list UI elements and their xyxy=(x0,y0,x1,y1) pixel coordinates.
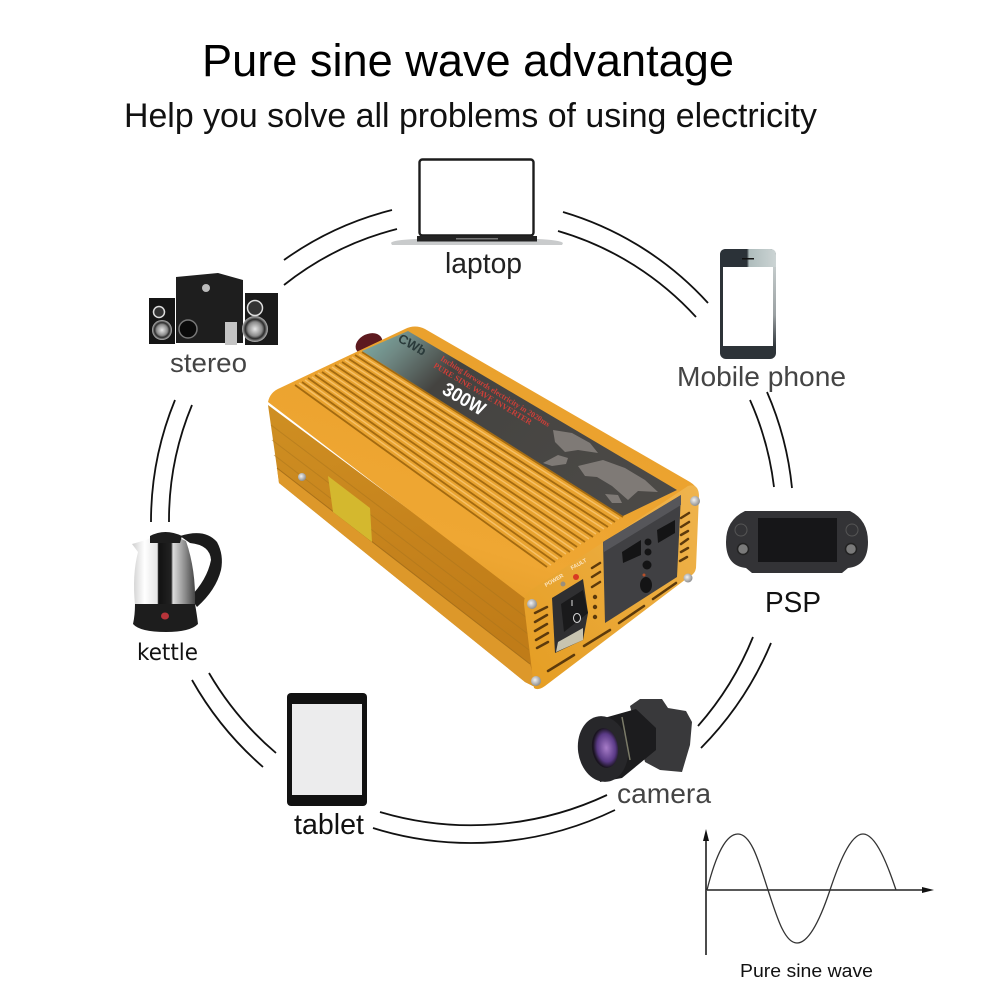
connector arcs: laptop to stereo xyxy=(284,210,397,285)
vent dots xyxy=(593,595,597,599)
label: camera: camera xyxy=(617,778,711,809)
label: laptop: laptop xyxy=(445,248,522,280)
inverter product: PURE SINE WAVE INVERTER xyxy=(432,361,534,427)
connector arcs: kettle to stereo xyxy=(151,400,192,522)
label: mobile phone: Mobile phone xyxy=(677,361,846,392)
title: Pure sine wave advantage xyxy=(202,35,734,86)
connector arcs: mobile phone to PSP xyxy=(750,392,792,488)
connector arcs: camera to tablet xyxy=(373,795,615,843)
chart: pure sine wave xyxy=(703,829,934,955)
inverter product: Inching forwards electricity in 2020ms xyxy=(439,354,552,429)
icon: camera xyxy=(574,699,692,785)
top face xyxy=(268,326,697,600)
indicator labels: POWER xyxy=(544,573,565,589)
connector arcs: laptop to mobile phone xyxy=(558,212,708,317)
side face xyxy=(268,405,537,688)
connector arcs: PSP to camera xyxy=(698,637,771,748)
map on label xyxy=(543,430,658,503)
icon: PSP xyxy=(726,511,868,573)
black label panel xyxy=(362,331,677,516)
label: PSP: PSP xyxy=(765,587,821,619)
socket xyxy=(603,495,681,623)
rocker switch xyxy=(552,579,588,653)
connector arcs: tablet to kettle xyxy=(192,673,276,767)
subtitle: Help you solve all problems of using electricity xyxy=(124,97,817,135)
icon: mobile phone xyxy=(720,249,776,359)
front face xyxy=(524,485,699,689)
vents xyxy=(535,513,689,671)
inverter product xyxy=(268,326,700,689)
inverter product: 300W xyxy=(438,379,489,420)
ribbed area xyxy=(295,352,623,567)
bottom lip xyxy=(277,468,537,688)
logo and label text: CWb xyxy=(396,331,429,359)
indicator lights xyxy=(560,582,566,586)
label: stereo: stereo xyxy=(170,348,247,378)
screws xyxy=(527,599,537,609)
yellow tape xyxy=(328,476,372,542)
chart caption: Pure sine wave xyxy=(740,961,873,981)
label: tablet: tablet xyxy=(294,809,364,841)
icon: kettle xyxy=(132,532,222,632)
icon: laptop xyxy=(391,160,563,245)
cooling ribs xyxy=(295,352,623,567)
icon: tablet xyxy=(287,693,367,806)
inverter product: FAULT xyxy=(570,558,589,572)
icon: stereo xyxy=(149,273,278,345)
label: kettle: kettle xyxy=(137,640,198,666)
knob xyxy=(352,329,386,359)
